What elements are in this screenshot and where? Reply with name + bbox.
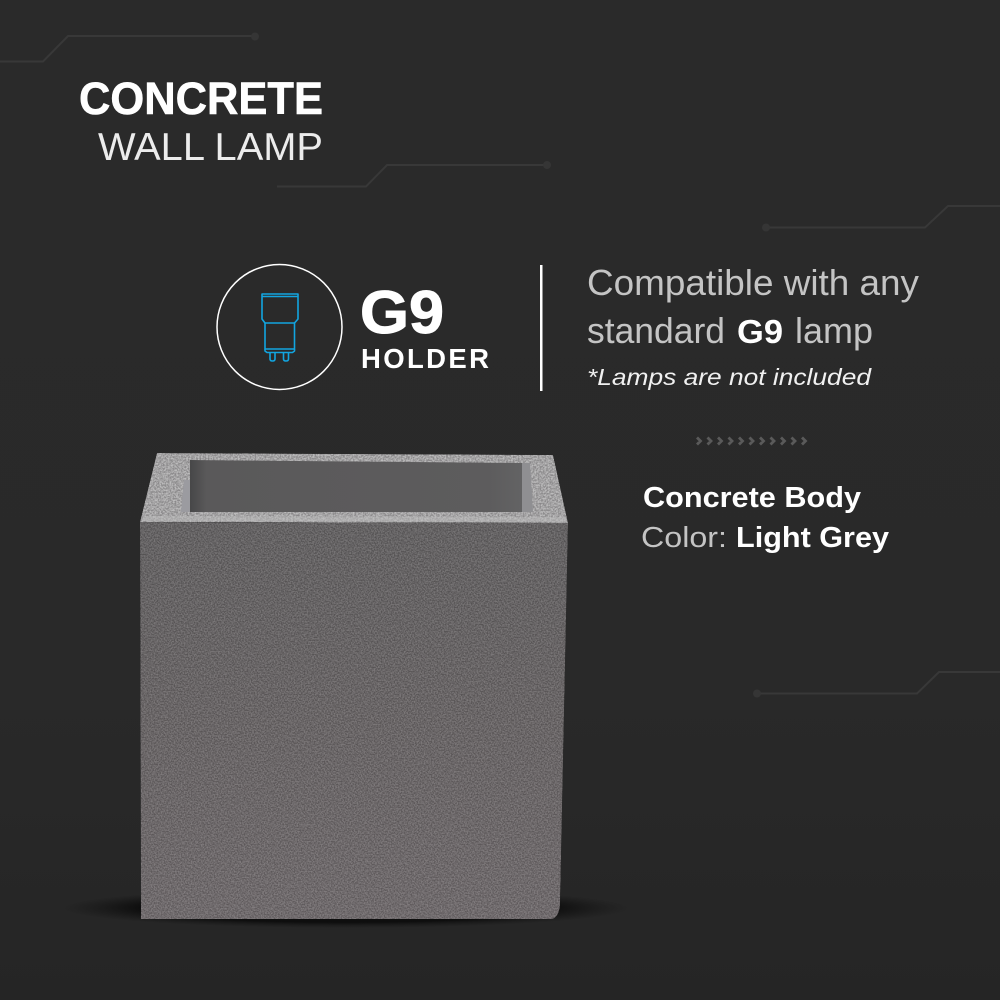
- material and colour text: Concrete Body: [643, 482, 861, 514]
- compatibility text: Compatible with any: [587, 262, 919, 303]
- compatibility text: lamp: [795, 310, 873, 351]
- compatibility text: *Lamps are not included: [587, 364, 872, 390]
- compatibility text: standard: [587, 310, 725, 351]
- material and colour text: Color:: [641, 522, 727, 554]
- lamp top face: [140, 453, 568, 523]
- holder label: HOLDER: [361, 343, 489, 374]
- lamp front face: [140, 522, 568, 919]
- title: CONCRETE: [79, 73, 323, 124]
- concrete wall lamp product: [61, 453, 631, 928]
- title: WALL LAMP: [98, 126, 323, 169]
- chevron separator: [697, 438, 806, 444]
- vertical divider: [540, 265, 542, 391]
- decorative circuit line: lower right: [753, 672, 1000, 698]
- compatibility text: G9: [737, 313, 783, 350]
- icon circle with G9 bulb: [217, 264, 342, 390]
- lamp opening: [181, 460, 533, 512]
- compatibility text: [587, 262, 919, 390]
- decorative circuit line: upper right: [762, 206, 1000, 232]
- floor shadow: [61, 888, 631, 928]
- decorative circuit line: top left: [0, 32, 259, 62]
- G9 holder badge: [217, 264, 489, 390]
- title: [79, 73, 323, 169]
- material and colour text: [641, 482, 889, 554]
- decorative circuit line: under title: [277, 161, 551, 186]
- rim front highlight: [142, 516, 566, 522]
- G9 label: G9: [360, 279, 444, 346]
- material and colour text: Light Grey: [736, 522, 889, 554]
